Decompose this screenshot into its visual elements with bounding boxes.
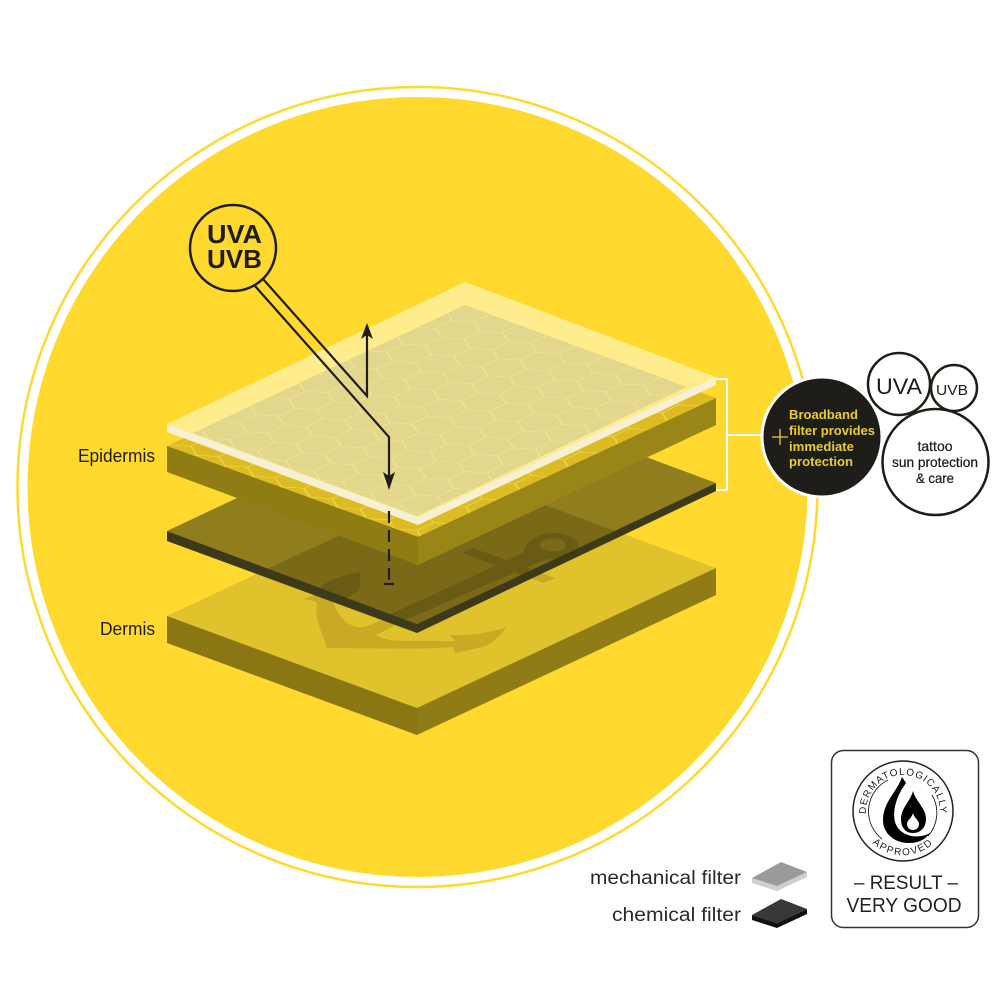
badge: dermatologically approved result (830, 750, 980, 928)
bubble: UVB (931, 365, 977, 411)
callout: broadband filter: protection (789, 454, 853, 469)
UVA UVB circle: UVA (207, 219, 262, 249)
seal (852, 760, 954, 862)
layer: chemical filter (167, 446, 716, 633)
background circle (18, 87, 818, 887)
layer: epidermis (167, 305, 716, 565)
bubble: tattoo sun protection & care: & care (916, 470, 954, 486)
layer: dermis (167, 476, 716, 735)
callout: broadband filter: filter provides (789, 423, 875, 438)
bubble: tattoo sun protection & care: sun protection (892, 454, 978, 470)
UVA UVB circle: UVB (207, 244, 262, 274)
UVA UVB circle (190, 205, 276, 291)
callout: broadband filter (762, 377, 882, 497)
badge: dermatologically approved result: VERY GOOD (846, 895, 962, 917)
bubble: tattoo sun protection & care (882, 409, 988, 515)
label: Dermis: Dermis (100, 619, 155, 639)
bubble: tattoo sun protection & care: tattoo (918, 438, 953, 454)
seal: APPROVED (872, 839, 931, 856)
bubble: UVA: UVA (876, 374, 922, 399)
label: Epidermis: Epidermis (78, 446, 155, 466)
bubble: UVA (868, 353, 930, 415)
layer: mechanical filter sheet (167, 282, 716, 525)
legend: chemical filter (612, 899, 807, 928)
arrows: UV rays (255, 279, 395, 584)
callout: broadband filter: Broadband (789, 407, 858, 422)
bracket (716, 379, 764, 490)
callout: broadband filter: immediate (789, 439, 854, 454)
badge: dermatologically approved result: – RESULT – (854, 873, 958, 894)
seal: DERMATOLOGICALLY (859, 768, 947, 814)
legend: mechanical filter: mechanical filter (590, 868, 742, 889)
tattoo anchor (303, 533, 578, 653)
legend: mechanical filter (590, 862, 807, 891)
legend: chemical filter: chemical filter (612, 905, 742, 926)
bubble: UVB: UVB (936, 382, 968, 399)
